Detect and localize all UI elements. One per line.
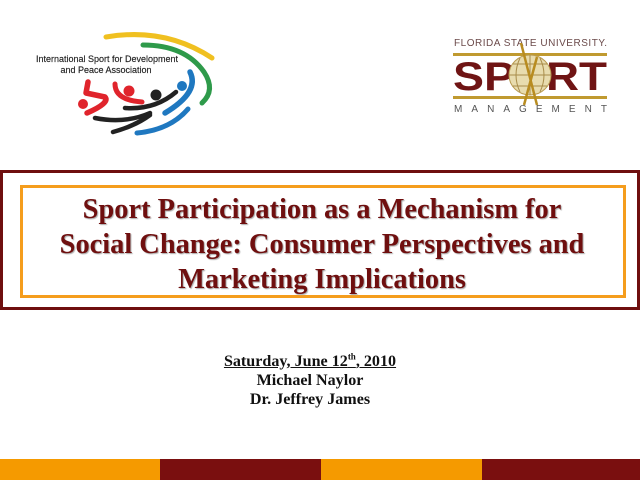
icon: globe with crossed javelins [509, 43, 551, 105]
panel: outer title frame [0, 170, 640, 310]
logo: Florida State University Sport Management: SP [453, 55, 515, 99]
title: Sport Participation as a Mechanism for [83, 194, 561, 225]
logo: Florida State University Sport Management: FLORIDA STATE UNIVERSITY. [454, 38, 607, 49]
logo: Florida State University Sport Management: RT [546, 55, 607, 99]
text block: date and presenters: Michael Naylor [257, 372, 363, 389]
panel: inner title frame [20, 185, 626, 298]
logo: International Sport for Development and Peace Association: International Sport for Development [36, 54, 178, 64]
logo: Florida State University Sport Management [453, 38, 607, 115]
logo: International Sport for Development and Peace Association: and Peace Association [60, 65, 152, 75]
logo: Florida State University Sport Management: MANAGEMENT [454, 104, 607, 115]
text block: date and presenters: Saturday, June 12th, 2010 [224, 352, 396, 370]
logo: International Sport for Development and Peace Association [36, 32, 214, 136]
title: Marketing Implications [178, 264, 466, 295]
text block: date and presenters [224, 352, 396, 408]
text block: date and presenters: Dr. Jeffrey James [250, 391, 370, 408]
title [60, 194, 586, 296]
title: Social Change: Consumer Perspectives and [60, 229, 584, 260]
footer colour bar [0, 459, 640, 480]
